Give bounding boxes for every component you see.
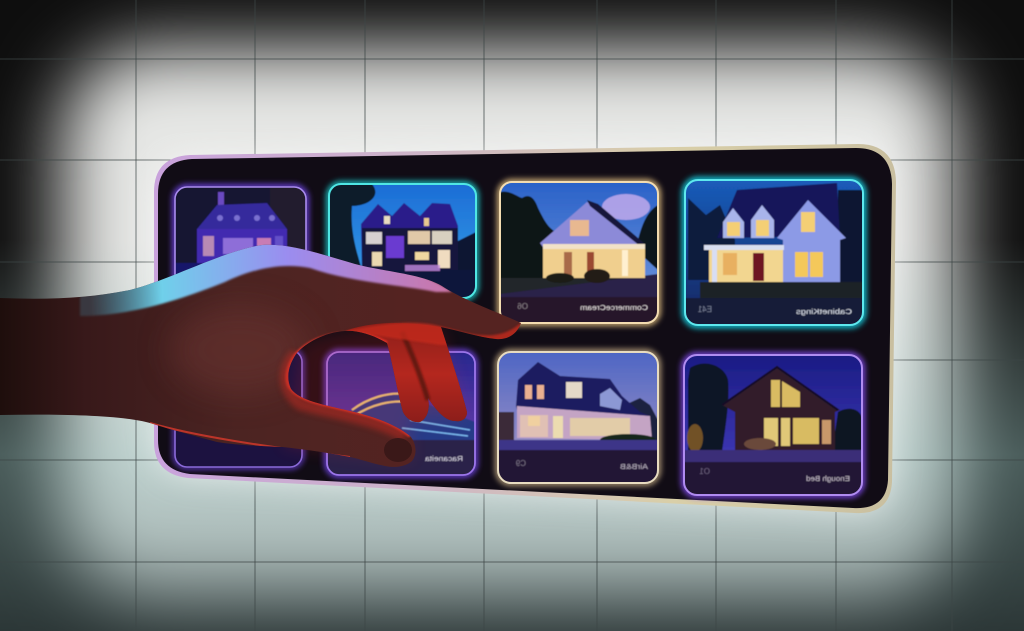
card 8 border <box>684 355 862 495</box>
background: lit wall with soft vignette <box>62 48 957 598</box>
card 4 number: E41 <box>697 305 712 314</box>
card 2 border <box>329 184 476 298</box>
card 5 glow <box>175 350 302 467</box>
card 1: violet outlined house <box>176 188 306 274</box>
card 7 glow <box>498 352 658 483</box>
hand: thumb nail <box>384 438 412 462</box>
card 6 border <box>327 352 475 475</box>
card 7 label: AirB&B <box>620 464 648 471</box>
card 7 border <box>498 352 658 483</box>
card 8 number: O1 <box>699 467 710 476</box>
card 3 glow <box>500 182 658 323</box>
card 4: periwinkle gabled house <box>685 180 863 325</box>
hand: lit top edge <box>80 242 452 316</box>
hand: fingers <box>345 323 475 425</box>
card 3 border <box>500 182 658 323</box>
card 2: blue manor house <box>329 184 476 298</box>
card 5 border <box>175 350 302 467</box>
card 4 caption: CabinetKings <box>796 307 852 316</box>
card 1 border <box>175 187 306 302</box>
card 3 number: O6 <box>517 302 528 311</box>
card 6 glow <box>327 352 475 475</box>
card 6 caption: Racaneita <box>425 456 463 463</box>
card 8 glow <box>684 355 862 495</box>
card 1 glow <box>175 187 306 302</box>
card 7: mansard roof house <box>498 352 658 483</box>
hand: reaching with index finger <box>0 242 525 467</box>
hand: index finger shading <box>345 323 525 345</box>
card 5: hidden dark card <box>175 350 302 467</box>
card 6: neon modern house <box>327 352 475 475</box>
card 4 glow <box>685 180 863 325</box>
hand: thumb rim <box>287 333 410 436</box>
card 3 caption: CommerceCream <box>580 303 648 312</box>
panel: device frame <box>154 144 896 513</box>
panel glow <box>156 145 892 511</box>
card 8: A-frame brown house <box>684 355 862 495</box>
card 2 glow <box>329 184 476 298</box>
hand: palm highlight <box>171 307 302 393</box>
card 3: cream lit house <box>500 182 658 323</box>
hand: lower edge rim <box>150 423 350 457</box>
hand red glow <box>283 327 467 461</box>
card 7 number: C9 <box>515 459 526 468</box>
card 8 caption: Enough Bed <box>806 476 850 483</box>
card 4 border <box>685 180 863 325</box>
